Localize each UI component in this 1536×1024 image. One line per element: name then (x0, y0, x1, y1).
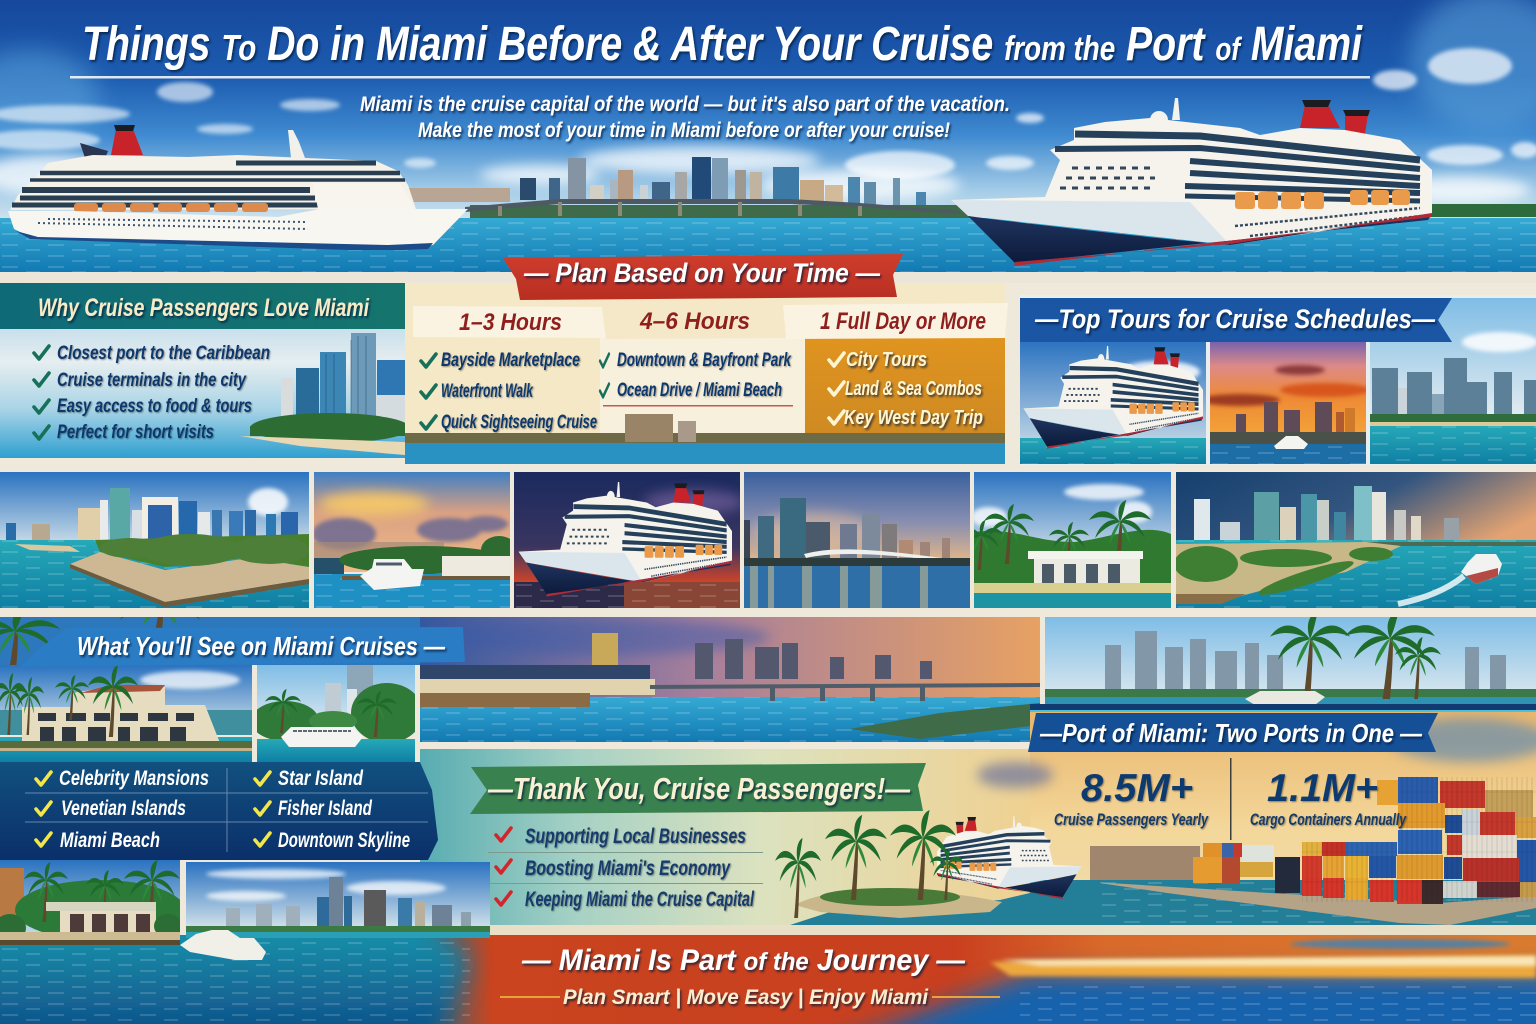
containers (1193, 777, 1536, 904)
photo: palms and skyline (1045, 617, 1536, 704)
title: Things To Do in Miami Before & After Your Cruise from the Port of Miami (82, 18, 1363, 71)
photo: skyline and yacht, lower middle (186, 862, 490, 938)
stat: cruise passengers (1054, 767, 1209, 829)
photo: tour ship (1020, 342, 1206, 464)
subtitle: Make the most of your time in Miami before or after your cruise! (418, 119, 950, 142)
sights: right column (255, 767, 410, 852)
photo strip (0, 472, 1536, 608)
photo 1: island marina (0, 472, 309, 608)
panel: top tours (1020, 295, 1536, 465)
list: thank you items: Boosting Miami's Economy (525, 857, 731, 880)
checklist: why: Closest port to the Caribbean (57, 343, 270, 364)
sights: left column (36, 767, 209, 852)
photo: waterfront villa, lower left (0, 860, 180, 945)
sights: left column: Celebrity Mansions (59, 767, 209, 790)
skyline: why panel (240, 333, 410, 455)
photo 3: ship at dusk (514, 472, 740, 608)
divider (1230, 758, 1232, 840)
checklist: why: Perfect for short visits (57, 422, 214, 443)
list: 4-6 hours (600, 350, 793, 406)
tabs (413, 303, 1008, 339)
heading: what you'll see: What You'll See on Miami Cruises — (77, 631, 446, 661)
ship: right cruise liner (951, 98, 1432, 266)
banner: top tours (1020, 298, 1452, 342)
yacht (180, 930, 266, 960)
panel: plan based on your time (405, 283, 1008, 464)
list: 1-3 hours (421, 350, 597, 433)
header scene: sky, skyline and water (0, 0, 1536, 272)
subtitle (360, 93, 1010, 142)
banner: port of Miami (1028, 713, 1438, 752)
list: thank you items: Keeping Miami the Cruise Capital (525, 888, 755, 911)
banner: plan based on your time: — Plan Based on Your Time — (523, 258, 881, 288)
heading: why: Why Cruise Passengers Love Miami (38, 294, 370, 322)
photo: canal cruise (257, 665, 415, 762)
orange full-day column (805, 338, 1005, 433)
sights: left column: Miami Beach (60, 829, 160, 852)
center skyline (405, 157, 926, 205)
list: thank you items: Supporting Local Businesses (525, 825, 746, 848)
palms above banner (0, 617, 200, 665)
ship: left cruise liner (8, 125, 468, 251)
tabs: 1–3 Hours (459, 309, 562, 336)
checklist: why: Cruise terminals in the city (57, 370, 247, 391)
list: 1-3 hours: Quick Sightseeing Cruise (441, 412, 597, 433)
island and ship scene (775, 762, 1100, 925)
strip under header (0, 272, 1536, 283)
banner: plan based on your time (503, 254, 903, 300)
list: thank you items (488, 825, 763, 911)
waterfront scene (405, 414, 1005, 464)
heading: port of Miami: —Port of Miami: Two Ports in One — (1039, 718, 1423, 748)
photo 4: evening skyline (744, 472, 970, 608)
banner: what you'll see (20, 627, 465, 667)
panel: port of Miami, two ports in one (1028, 704, 1536, 925)
tabs: 4–6 Hours (639, 308, 750, 335)
photo: sunset skyline (1210, 342, 1366, 464)
list: full day (829, 349, 983, 429)
photo: day skyline (1370, 298, 1536, 464)
panel: thank you, cruise passengers (420, 749, 1040, 925)
subtitle: Miami is the cruise capital of the world — but it's also part of the vacation. (360, 93, 1010, 116)
stat: cruise passengers: Cruise Passengers Yearly (1054, 810, 1209, 829)
sights: right column: Downtown Skyline (278, 829, 410, 852)
sights: right column: Star Island (278, 767, 364, 790)
list: full day: City Tours (846, 349, 927, 371)
section: what you'll see on Miami cruises (0, 587, 465, 766)
photo 2: yacht at sunset (314, 472, 510, 608)
heading: thank you: —Thank You, Cruise Passengers!— (487, 771, 911, 806)
heading: journey: — Miami Is Part of the Journey — (521, 944, 966, 977)
stat: cruise passengers: 8.5M+ (1081, 767, 1193, 810)
bottom band: Miami is part of the journey (0, 920, 1536, 1024)
panel: why cruise passengers love Miami (0, 283, 410, 458)
tabs: 1 Full Day or More (820, 308, 986, 335)
photo: bay panorama (420, 617, 1040, 742)
list: 1-3 hours: Bayside Marketplace (441, 350, 580, 371)
pier (1093, 882, 1536, 925)
stat: cargo containers (1250, 767, 1407, 829)
banner: thank you (470, 763, 926, 814)
photo 5: waterfront villa (974, 472, 1171, 608)
heading: top tours: —Top Tours for Cruise Schedules— (1034, 304, 1436, 334)
sights: right column: Fisher Island (278, 797, 373, 820)
stat: cargo containers: 1.1M+ (1267, 767, 1378, 810)
list: 1-3 hours: Waterfront Walk (441, 381, 534, 402)
list: full day: Key West Day Trip (844, 407, 983, 429)
tagline: Plan Smart | Move Easy | Enjoy Miami (563, 986, 929, 1009)
checklist: why (34, 343, 270, 443)
bridge (465, 199, 970, 218)
checklist: why: Easy access to food & tours (57, 396, 252, 417)
list: 4-6 hours: Ocean Drive / Miami Beach (617, 380, 782, 401)
list: full day: Land & Sea Combos (845, 378, 982, 400)
sights: left column: Venetian Islands (61, 797, 186, 820)
photo 6: bay with boat (1176, 472, 1536, 608)
panel: navy sights checklist (0, 762, 438, 860)
photo: mansion (0, 665, 252, 762)
list: 4-6 hours: Downtown & Bayfront Park (617, 350, 792, 371)
stat: cargo containers: Cargo Containers Annually (1250, 810, 1407, 829)
